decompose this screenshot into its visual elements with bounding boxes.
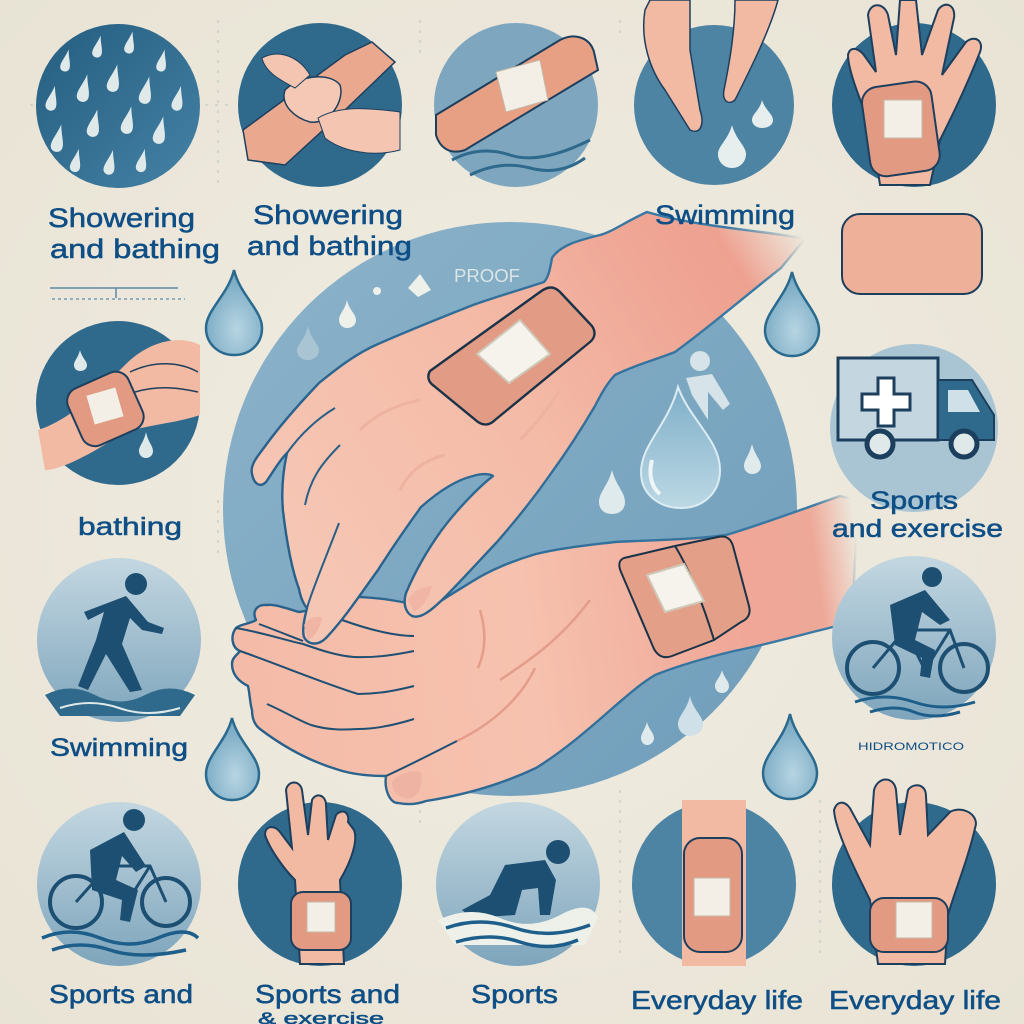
bandage on upper hand bbox=[428, 288, 594, 424]
label: bathing: bathing bbox=[78, 513, 182, 541]
icon: open palm with bandage bbox=[832, 780, 996, 966]
headings row 1: and bathing bbox=[247, 231, 412, 261]
headings row 1: Showering bbox=[48, 203, 195, 233]
headings row 1: Swimming bbox=[655, 200, 795, 230]
central water drops bbox=[297, 274, 761, 745]
labels: bottom row: Everyday life bbox=[631, 985, 803, 1015]
plain bandage bbox=[842, 214, 982, 294]
label: swimming: Swimming bbox=[50, 734, 188, 762]
icon: hands applying bandage bbox=[238, 23, 402, 187]
label: sports and exercise: and exercise bbox=[832, 515, 1003, 543]
label: sports and exercise: Sports bbox=[870, 487, 958, 515]
icon: fingers with droplet bbox=[634, 0, 794, 185]
icon: ambulance bbox=[830, 344, 998, 512]
icon: forearm bandage bbox=[632, 800, 796, 966]
headings row 1: Showering bbox=[253, 200, 403, 230]
label: blurred small caption: HIDROMOTICO bbox=[858, 741, 965, 753]
icon: small hand with bandage bbox=[238, 782, 402, 966]
headings row 1: and bathing bbox=[50, 234, 220, 264]
lower hand bbox=[232, 496, 858, 804]
bandage on lower hand bbox=[619, 536, 750, 657]
labels: bottom row: Everyday life bbox=[829, 985, 1001, 1015]
labels: bottom row bbox=[49, 979, 1001, 1024]
icon: cyclist right bbox=[832, 556, 996, 720]
labels: bottom row: Sports and bbox=[255, 979, 400, 1009]
icon: crawling swimmer bbox=[436, 802, 600, 966]
label: proof: PROOF bbox=[454, 266, 520, 286]
side water drops bbox=[206, 270, 819, 800]
labels: bottom row: Sports bbox=[471, 979, 558, 1009]
icon: runner bbox=[37, 558, 201, 722]
labels: bottom row: Sports and bbox=[49, 979, 193, 1009]
icon: bandage over water bbox=[434, 23, 598, 187]
label: sports and exercise bbox=[832, 487, 1003, 543]
icon: raised hand with bandage bbox=[832, 0, 996, 187]
headings row 1 bbox=[48, 200, 795, 264]
upper hand bbox=[252, 212, 805, 644]
icon: wrist bandage with drops bbox=[36, 321, 200, 485]
central circle bbox=[223, 222, 797, 796]
icon: rain circle bbox=[36, 24, 200, 188]
icon: cyclist bottom left bbox=[37, 802, 201, 966]
